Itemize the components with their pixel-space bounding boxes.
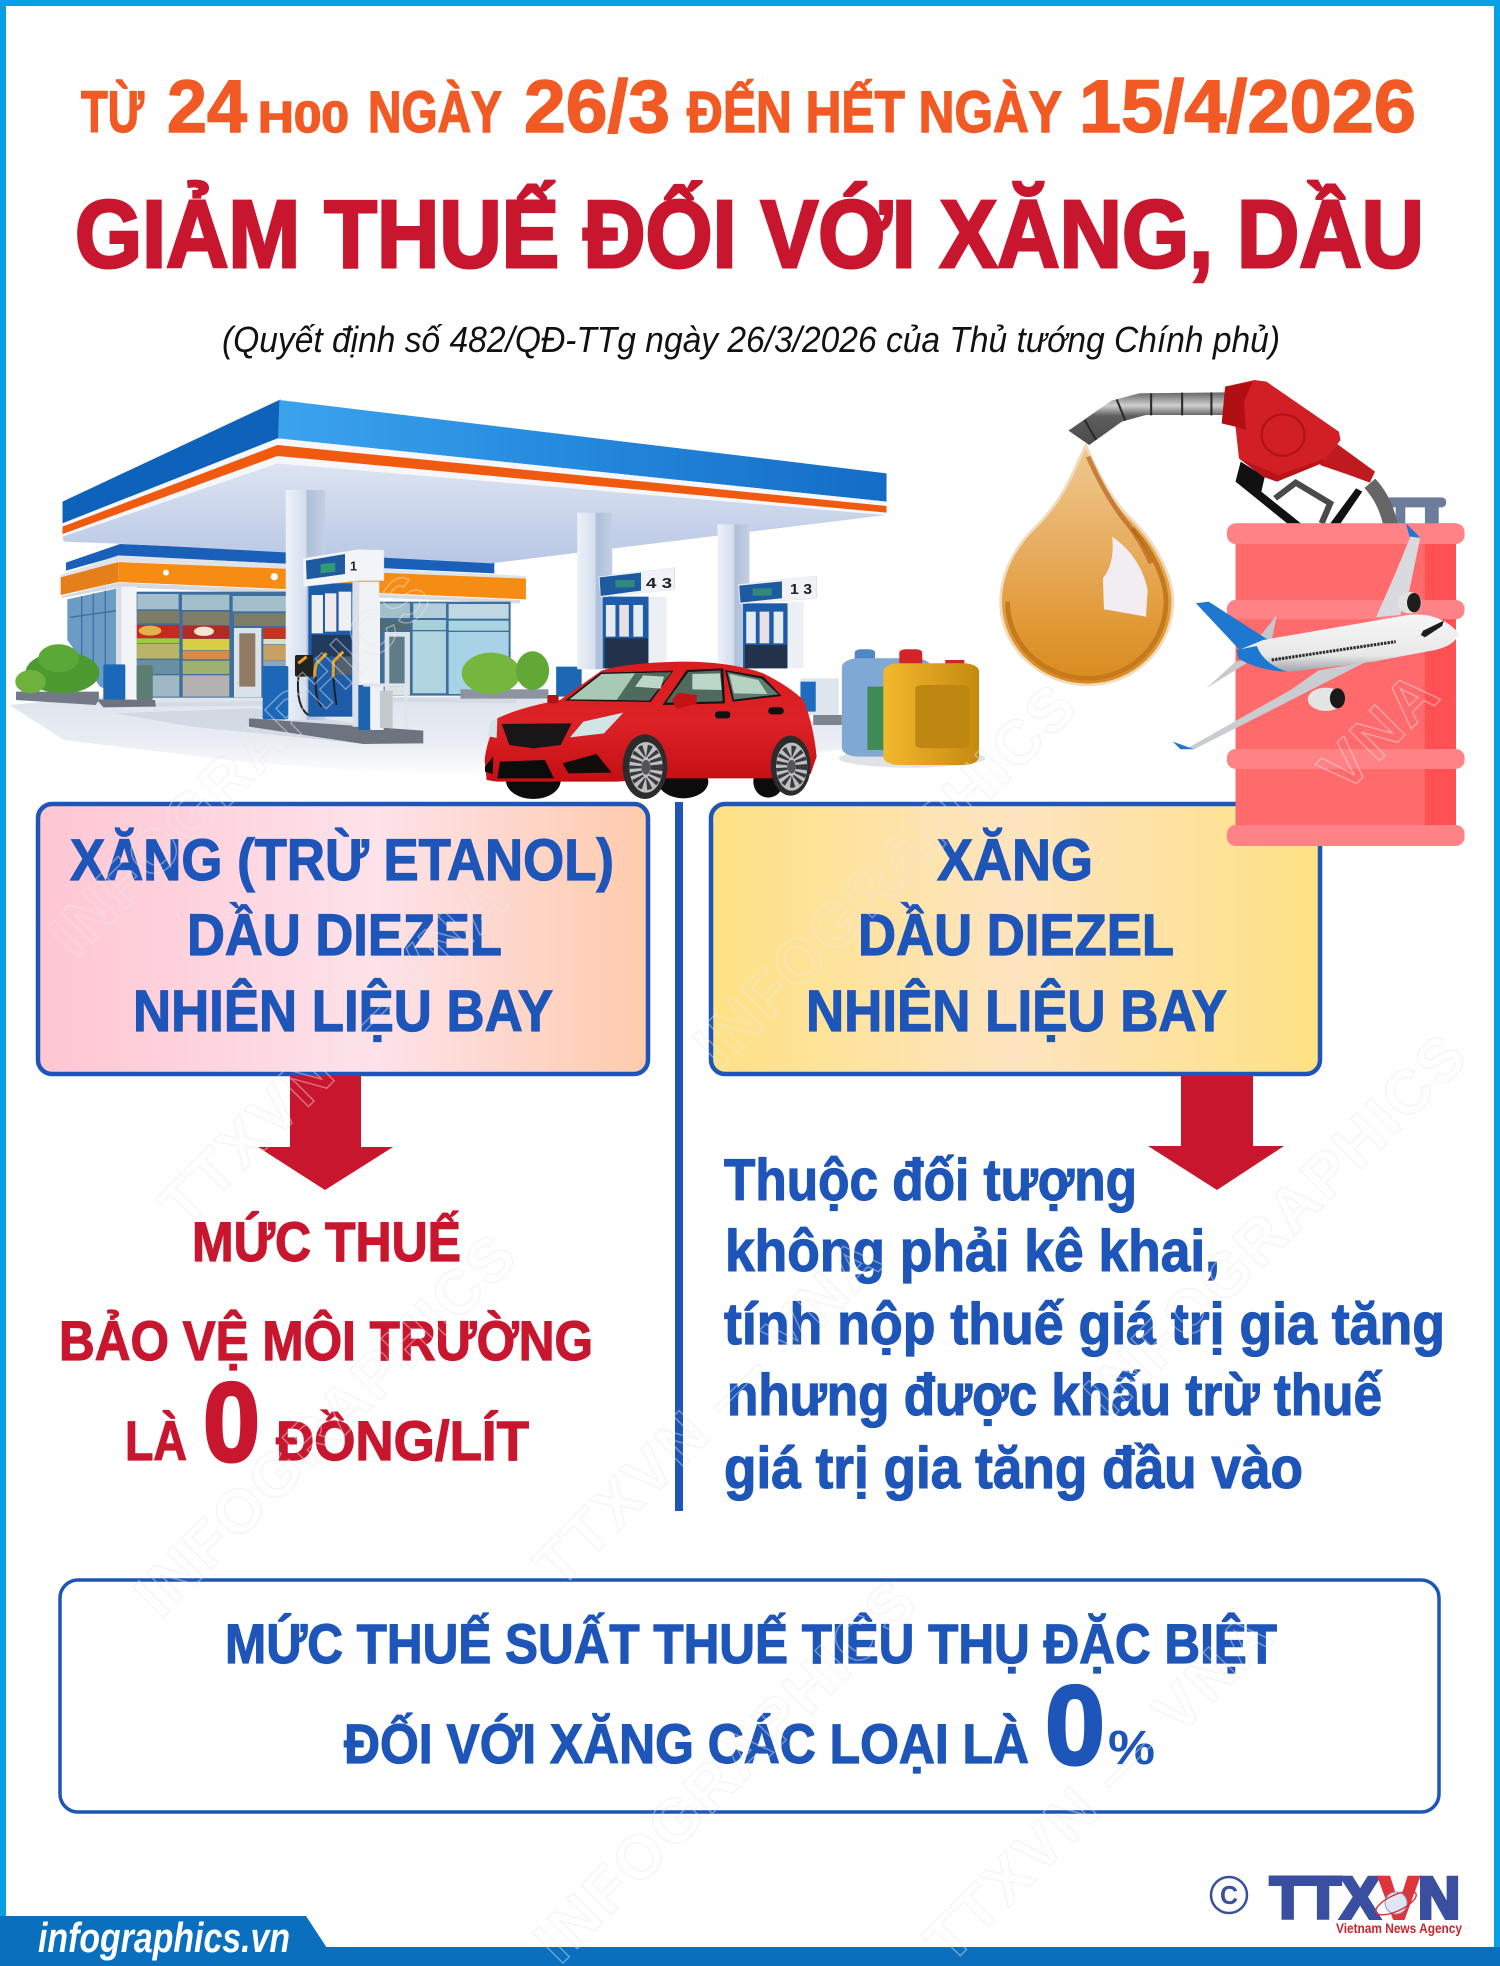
panel: special consumption tax: [60, 1580, 1439, 1812]
panel: right fuel categories: DẦU DIEZEL: [858, 903, 1174, 968]
footer bar: infographics.vn: [38, 1914, 290, 1961]
panel: left fuel categories: DẦU DIEZEL: [187, 903, 502, 968]
panel: special consumption tax: %: [1108, 1722, 1155, 1775]
pump 3: [743, 603, 788, 668]
nozzle spout: [1068, 392, 1225, 445]
pump 1: 1: [350, 560, 357, 574]
hose: [1370, 483, 1390, 525]
divider: [675, 802, 683, 1511]
heading: date range: 15/4/2026: [1079, 65, 1416, 148]
jugs: [839, 649, 985, 768]
panel: left fuel categories: [38, 804, 648, 1074]
panel: right fuel categories: XĂNG: [937, 828, 1093, 893]
illustration: petrol station: 1 3: [790, 581, 812, 598]
text: VAT treatment: Thuộc đối tượng: [724, 1148, 1137, 1213]
heading: date range: H00: [258, 93, 349, 142]
text: VAT treatment: tính nộp thuế giá trị gia tăng: [724, 1292, 1445, 1357]
arrow: right: [1148, 1076, 1284, 1190]
watermarks: INFOGRAPHICS: [121, 1220, 531, 1630]
logo: TTXVN: TTXVN: [1270, 1866, 1460, 1931]
text: environmental tax rate: LÀ: [125, 1409, 187, 1472]
subtitle: legal basis: (Quyết định số 482/QĐ-TTg ngày 26/3/2026 của Thủ tướng Chính phủ): [222, 319, 1280, 360]
text: VAT treatment: giá trị gia tăng đầu vào: [724, 1436, 1303, 1501]
watermarks: TTXVN — VNA: [911, 1599, 1288, 1966]
shop building: [61, 544, 526, 707]
pump 1: [249, 549, 423, 744]
barrel cap: [1384, 497, 1446, 525]
panel: special consumption tax: MỨC THUẾ SUẤT THUẾ TIÊU THỤ ĐẶC BIỆT: [225, 1612, 1277, 1675]
watermarks: INFOGRAPHICS: [1071, 1020, 1481, 1430]
car: [485, 662, 817, 799]
illustration: petrol station: [10, 399, 985, 799]
panel: right fuel categories: [711, 804, 1320, 1074]
logo: TTXVN: Vietnam News Agency: [1336, 1920, 1462, 1936]
illustration: nozzle, oil drop, barrel and plane: [1001, 380, 1465, 846]
trigger: [1236, 462, 1301, 523]
bushes: [16, 692, 99, 705]
pump numbers: 4 3: [646, 575, 672, 592]
watermarks: [36, 560, 1481, 1966]
text: VAT treatment: [724, 1148, 1445, 1501]
barrel: [1236, 523, 1456, 842]
watermarks: TTXVN — VNA: [521, 1223, 898, 1600]
panel: right fuel categories: NHIÊN LIỆU BAY: [806, 979, 1227, 1044]
logo: TTXVN: C: [1220, 1880, 1238, 1910]
columns: [286, 490, 325, 720]
watermarks: TTXVN — VNA: [146, 863, 523, 1240]
panel: left fuel categories: NHIÊN LIỆU BAY: [133, 979, 553, 1044]
canopy: [63, 463, 887, 563]
watermarks: INFOGRAPHICS: [681, 670, 1091, 1080]
heading: date range: TỪ: [81, 80, 145, 145]
nozzle body: [1320, 444, 1375, 483]
text: environmental tax rate: MỨC THUẾ: [192, 1210, 461, 1273]
panel: special consumption tax: 0: [1045, 1663, 1105, 1788]
text: environmental tax rate: [59, 1210, 593, 1485]
watermarks: INFOGRAPHICS: [521, 1566, 931, 1966]
text: environmental tax rate: ĐỒNG/LÍT: [276, 1409, 529, 1472]
pump 2: [603, 597, 649, 668]
watermarks: VNA: [1306, 657, 1454, 805]
footer bar: [0, 1914, 1500, 1966]
panel: left fuel categories: XĂNG (TRỪ ETANOL): [70, 828, 614, 893]
heading: date range: [81, 65, 1416, 148]
text: environmental tax rate: 0: [203, 1360, 260, 1485]
heading: date range: NGÀY: [368, 80, 502, 145]
heading: date range: 24: [167, 65, 247, 148]
text: VAT treatment: nhưng được khấu trừ thuế: [727, 1363, 1383, 1428]
watermarks: INFOGRAPHICS: [36, 560, 446, 970]
plane: [1173, 523, 1459, 749]
heading: date range: 26/3: [524, 65, 670, 148]
arrow: left: [258, 1076, 393, 1190]
oil drop: [1001, 445, 1173, 685]
text: VAT treatment: không phải kê khai,: [725, 1219, 1220, 1284]
text: environmental tax rate: BẢO VỆ MÔI TRƯỜNG: [59, 1309, 593, 1372]
heading: date range: ĐẾN HẾT NGÀY: [687, 80, 1062, 145]
panel: special consumption tax: ĐỐI VỚI XĂNG CÁC LOẠI LÀ: [344, 1712, 1029, 1775]
